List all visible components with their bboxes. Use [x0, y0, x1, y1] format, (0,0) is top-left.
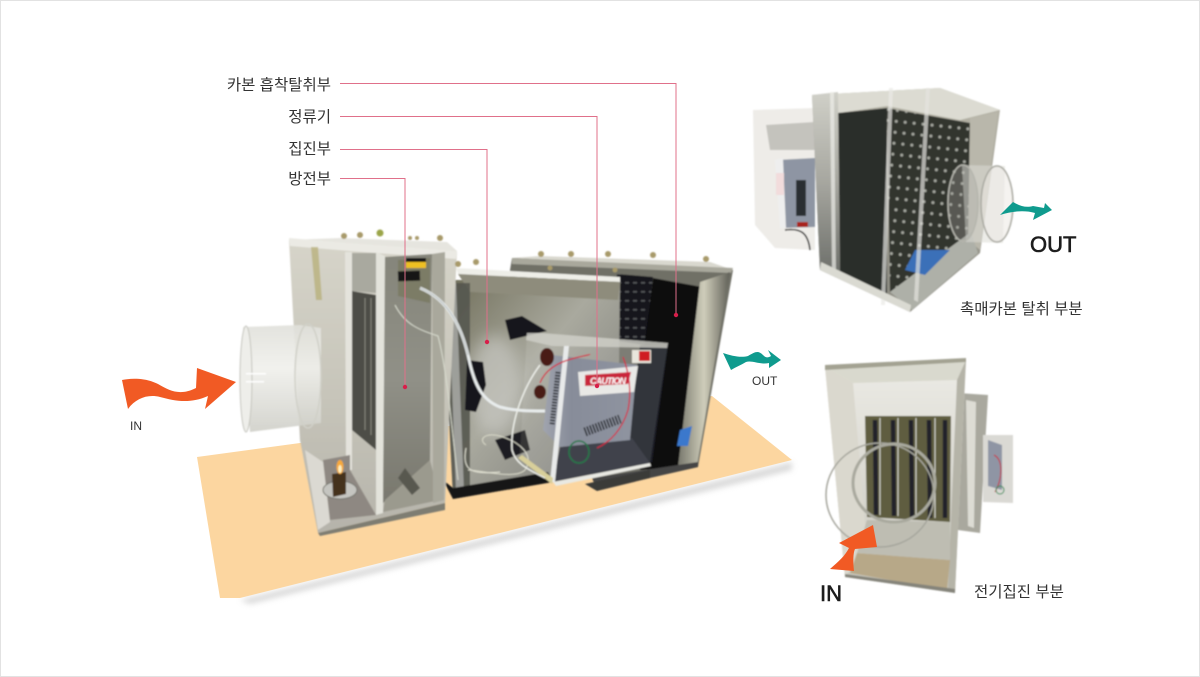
- side parts: [958, 393, 1013, 533]
- wing nuts on rear box: [538, 251, 709, 272]
- arrow: inlet flow: [122, 368, 236, 409]
- leader: discharge section: [340, 178, 407, 389]
- left discharge box: [289, 238, 457, 536]
- label: carbon adsorption and desorption section: 카본 흡착탈취부: [227, 76, 331, 94]
- arrow: collection inlet flow: [830, 525, 877, 571]
- power supply enclosure: [518, 333, 668, 486]
- caption: catalytic carbon desorption section: 촉매카본 탈취 부분: [960, 300, 1083, 318]
- label: rectifier: 정류기: [288, 108, 331, 126]
- label: collection section: 집진부: [288, 140, 331, 158]
- leader: rectifier: [340, 116, 599, 388]
- inlet ring: [826, 443, 935, 547]
- power supply unit: CAUTION: [590, 376, 626, 386]
- leader: collection section: [340, 150, 489, 344]
- heading: IN: IN: [820, 581, 842, 606]
- floor plate: [197, 396, 792, 604]
- rear carbon box: [505, 256, 733, 490]
- label: OUT: OUT: [752, 374, 778, 388]
- main apparatus photo: [240, 230, 733, 536]
- photo: catalytic carbon desorption section: [753, 88, 1013, 312]
- power supply unit: [543, 355, 638, 447]
- middle collector box: [442, 268, 650, 499]
- label: discharge section: 방전부: [288, 170, 331, 188]
- photo: electrostatic collection section: [825, 358, 1013, 593]
- acrylic box and carbon: [812, 88, 1000, 312]
- arrow: outlet flow: [723, 350, 781, 370]
- leader: carbon adsorption section: [340, 84, 678, 317]
- candle: [323, 460, 357, 499]
- arrow: desorption outlet flow: [1000, 202, 1052, 220]
- caption: electrostatic collection section: 전기집진 부분: [974, 583, 1064, 601]
- acrylic chamber: [825, 358, 966, 593]
- faded power supply enclosure: [753, 108, 815, 250]
- heading: OUT: OUT: [1030, 232, 1076, 257]
- outlet pipe: [948, 165, 1013, 243]
- wires: [395, 288, 630, 480]
- inlet pipe: [240, 324, 321, 432]
- leader lines and markers: [340, 84, 678, 389]
- label: IN: IN: [130, 419, 142, 433]
- wing nuts on left box: [341, 230, 479, 267]
